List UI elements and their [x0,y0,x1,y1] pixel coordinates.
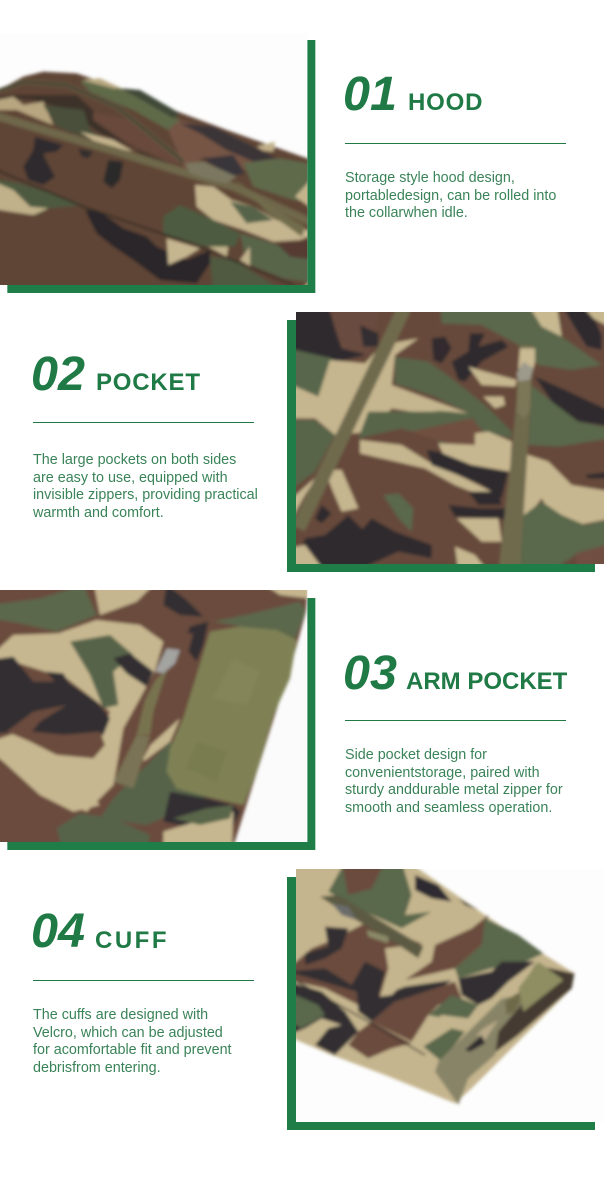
heading: 03 arm pocket: 03 [343,646,397,700]
text: pocket description: are easy to use, equipped with [33,470,228,486]
panel: pocket photo with green frame [287,312,604,572]
heading: 04 cuff [31,904,169,958]
text: pocket description: warmth and comfort. [33,505,164,521]
text: cuff description: Velcro, which can be adjusted [33,1025,223,1041]
text: hood description: Storage style hood design, [345,170,515,186]
text: arm pocket description [345,747,563,816]
text: pocket description [33,452,258,521]
text: arm pocket description: sturdy anddurable metal zipper for [345,782,563,798]
heading: 04 cuff: 04 [31,904,85,958]
frame: green corner bars [7,40,315,293]
text: arm pocket description: smooth and seamless operation. [345,800,552,816]
frame: green corner bars [287,877,595,1130]
text: cuff description [33,1007,232,1076]
text: arm pocket description: Side pocket design for [345,747,487,763]
text: cuff description: debrisfrom entering. [33,1060,161,1076]
heading: 02 pocket [31,347,201,401]
photo: sleeve pocket and velcro patch [0,582,308,852]
photo: cuff with velcro tab [288,862,574,1105]
heading: 02 pocket: POCKET [96,369,201,396]
panel: hood photo with green frame [0,40,316,293]
heading: 02 pocket: 02 [31,347,85,401]
heading: 01 hood [343,67,483,121]
frame: green corner bars [7,598,315,850]
heading: 01 hood: HOOD [408,89,483,116]
photo: rolled hood [0,72,317,297]
text: hood description [345,170,556,221]
frame: green corner bars [287,320,595,572]
text: pocket description: The large pockets on both sides [33,452,236,468]
heading: 04 cuff: CUFF [95,927,169,954]
heading: 03 arm pocket: ARM POCKET [406,668,567,695]
heading: 03 arm pocket [343,646,568,700]
panel: cuff photo with green frame [287,869,595,1130]
text: cuff description: for acomfortable fit and prevent [33,1042,232,1058]
text: cuff description: The cuffs are designed with [33,1007,208,1023]
panel: arm pocket photo with green frame [0,590,316,850]
text: hood description: the collarwhen idle. [345,205,468,221]
photo: camo chest pocket [288,305,604,572]
text: arm pocket description: convenientstorage, paired with [345,765,540,781]
text: hood description: portabledesign, can be rolled into [345,188,556,204]
text: pocket description: invisible zippers, providing practical [33,487,258,503]
heading: 01 hood: 01 [343,67,397,121]
